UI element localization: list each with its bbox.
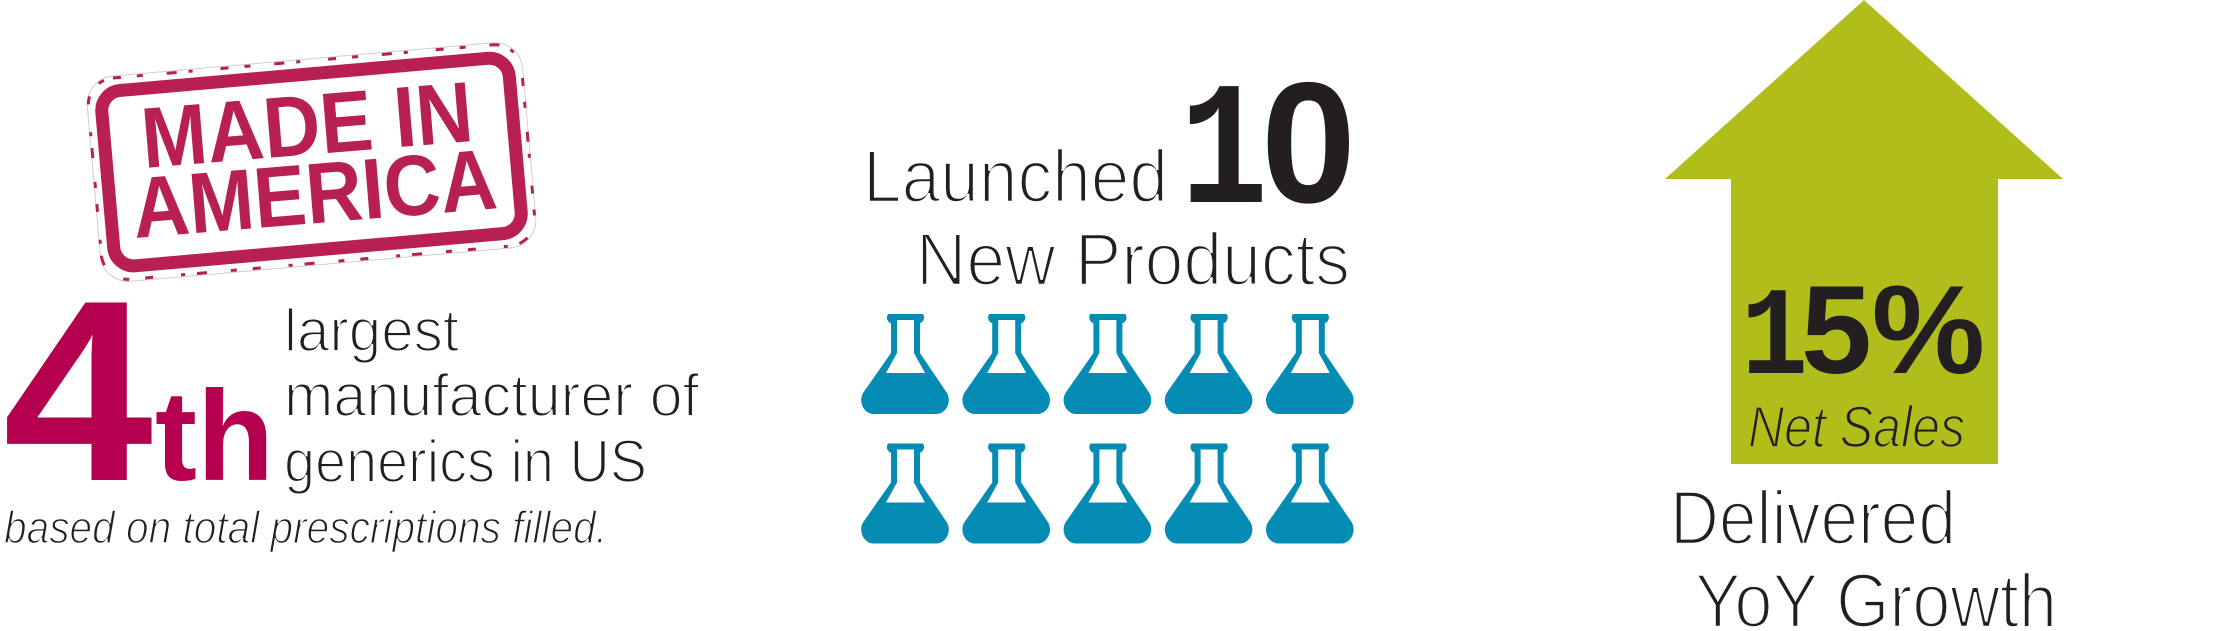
icon: made in America stamp	[85, 40, 538, 284]
flask 6	[861, 444, 949, 544]
panel: made in America, 4th largest	[3, 40, 699, 553]
flask 7	[962, 444, 1050, 544]
stamp text: AMERICA: AMERICA	[129, 131, 500, 257]
flask 3	[1064, 314, 1151, 414]
big number: 15%: 5%	[1801, 261, 1985, 400]
flask 1	[861, 314, 949, 414]
big rank: 4th: 4	[3, 246, 155, 535]
footnote: based on total prescriptions filled: based on total prescriptions filled.	[4, 502, 607, 553]
text: Delivered: Delivered	[1670, 476, 1956, 561]
arrow: up arrow	[1665, 0, 2063, 464]
big number: 10: 0	[1261, 47, 1356, 239]
text: largest manufacturer of generics in US: largest	[284, 297, 459, 364]
panel: delivered YoY growth	[1665, 0, 2063, 631]
flask 8	[1064, 444, 1151, 544]
flask 9	[1165, 444, 1252, 544]
big number: 15%	[1741, 261, 1985, 411]
flask 2	[962, 314, 1050, 414]
big rank: 4th: th	[155, 365, 274, 508]
text: largest manufacturer of generics in US	[284, 297, 699, 495]
flask 5	[1266, 314, 1354, 414]
text: New Products: New Products	[916, 218, 1350, 301]
text: largest manufacturer of generics in US: manufacturer of	[284, 362, 699, 429]
flask 10	[1266, 444, 1354, 544]
panel: launched 10 new products	[861, 47, 1356, 544]
big number: 10: 1	[1180, 55, 1268, 255]
big number: 10	[1180, 47, 1356, 255]
big number: 15%: 1	[1741, 269, 1808, 411]
icons: ten flasks	[861, 314, 1354, 544]
label: Net Sales: Net Sales	[1748, 395, 1965, 460]
text: Launched: Launched	[863, 135, 1168, 218]
stamp text: MADE IN: MADE IN	[138, 64, 476, 187]
text: largest manufacturer of generics in US: generics in US	[284, 428, 647, 495]
flask 4	[1165, 314, 1252, 414]
big rank: 4th	[3, 246, 274, 535]
